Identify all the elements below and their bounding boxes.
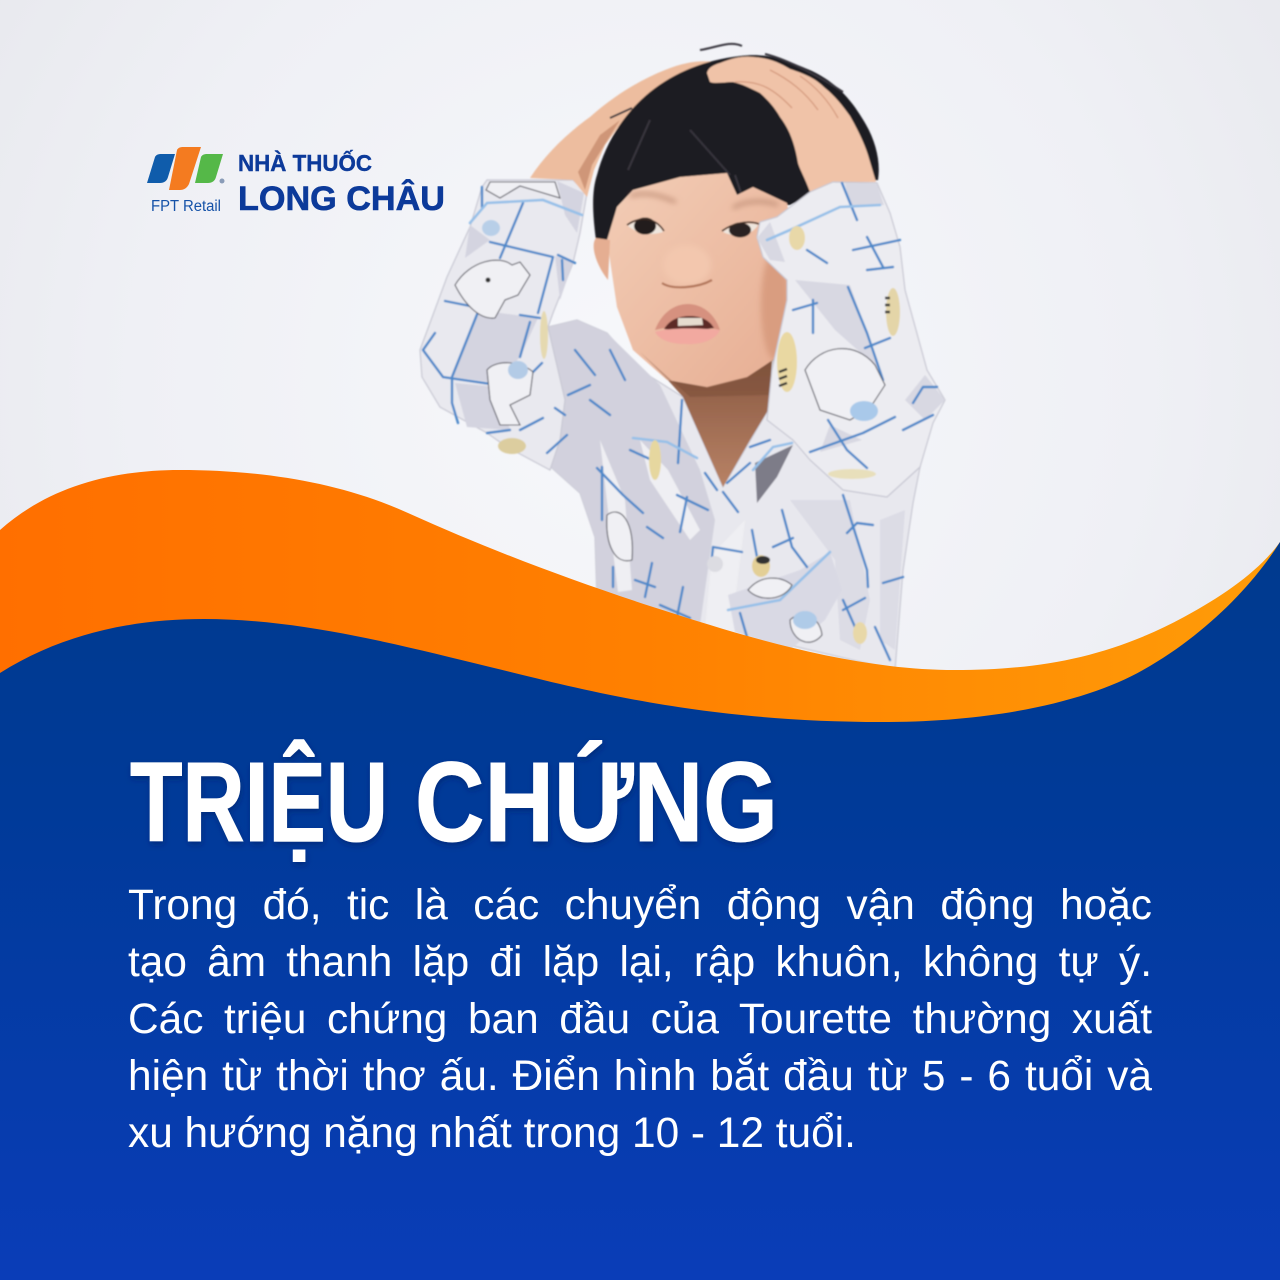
body text: Các triệu chứng ban đầu của Tourette thường xuất xyxy=(128,995,1152,1042)
eyes xyxy=(627,218,759,238)
nose xyxy=(663,245,711,285)
left arm and hand xyxy=(530,61,725,197)
body text xyxy=(128,881,1152,1156)
face xyxy=(607,173,795,387)
title: TRIỆU xyxy=(130,739,388,865)
dark collar patch xyxy=(755,445,793,503)
cheek shadow xyxy=(761,250,789,360)
right sleeve xyxy=(757,182,945,497)
light blue piping xyxy=(470,200,880,610)
photo: child holding head xyxy=(420,44,945,670)
arm shadow xyxy=(578,120,620,190)
brand line one: NHÀ THUỐC xyxy=(238,149,372,176)
chin shadow xyxy=(640,352,775,397)
right chest shading xyxy=(790,500,905,650)
left sleeve xyxy=(420,180,587,470)
right hand xyxy=(707,57,876,192)
title xyxy=(130,739,778,865)
shirt check lines xyxy=(423,183,937,660)
eyebrows xyxy=(630,194,778,208)
bear prints xyxy=(455,182,885,642)
blue panel xyxy=(0,542,1280,1280)
orange wave xyxy=(0,470,1280,760)
logo: FPT Retail, Nhà thuốc Long Châu xyxy=(147,147,445,218)
yellow and blue print details xyxy=(482,220,900,644)
hair xyxy=(593,55,879,245)
pocket xyxy=(728,552,842,650)
neck xyxy=(650,350,772,487)
finger lines xyxy=(735,70,838,118)
body text: xu hướng nặng nhất trong 10 - 12 tuổi. xyxy=(128,1109,856,1156)
hair strands xyxy=(610,44,843,205)
title: CHỨNG xyxy=(415,739,778,865)
icon: FPT leaves xyxy=(147,147,224,190)
body text: tạo âm thanh lặp đi lặp lại, rập khuôn, không tự ý. xyxy=(128,938,1152,985)
body text: hiện từ thời thơ ấu. Điển hình bắt đầu từ 5 - 6 tuổi và xyxy=(128,1052,1152,1099)
left chest shading xyxy=(543,320,715,625)
ear xyxy=(594,238,610,280)
shirt light folds xyxy=(600,440,745,640)
mouth xyxy=(655,304,720,344)
right sleeve shading xyxy=(757,183,945,452)
brand line two: LONG CHÂU xyxy=(238,180,445,218)
body text: Trong đó, tic là các chuyển động vận động hoặc xyxy=(128,881,1152,928)
shirt body xyxy=(543,320,920,670)
FPT Retail wordmark: FPT Retail xyxy=(151,198,221,215)
left sleeve shading xyxy=(453,181,584,430)
